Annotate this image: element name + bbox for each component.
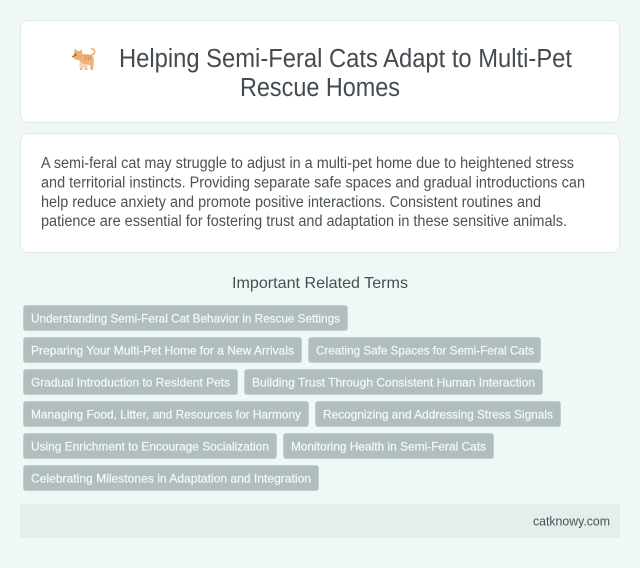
- chip: understanding behavior: Understanding Semi-Feral Cat Behavior in Rescue Settings: [31, 312, 340, 326]
- chip: celebrating milestones: [23, 465, 319, 491]
- summary text: patience are essential for fostering trust and adaptation in these sensitive animals.: [41, 213, 567, 230]
- title text: Helping Semi-Feral Cats Adapt to Multi-Pet: [119, 45, 572, 73]
- chip: monitoring health: [283, 433, 494, 459]
- footer source text: catknowy.com: [533, 514, 610, 528]
- icon: orange cat: [72, 48, 96, 70]
- chip: stress signals: Recognizing and Addressing Stress Signals: [323, 408, 553, 422]
- title text: [119, 45, 572, 102]
- chip: celebrating milestones: Celebrating Milestones in Adaptation and Integration: [31, 472, 311, 486]
- chip: managing resources: Managing Food, Litter, and Resources for Harmony: [31, 408, 301, 422]
- heading: important related terms: Important Related Terms: [232, 275, 408, 292]
- footer bar: [20, 504, 620, 538]
- chip: enrichment: [23, 433, 277, 459]
- summary text: [41, 155, 585, 230]
- chip: stress signals: [315, 401, 561, 427]
- chip: understanding behavior: [23, 305, 348, 331]
- chip: monitoring health: Monitoring Health in Semi-Feral Cats: [291, 440, 486, 454]
- panel: related term chips: [23, 305, 561, 491]
- chip: safe spaces: Creating Safe Spaces for Semi-Feral Cats: [316, 344, 534, 358]
- summary text: and territorial instincts. Providing separate safe spaces and gradual introductions can: [41, 174, 585, 192]
- chip: building trust: Building Trust Through Consistent Human Interaction: [252, 376, 535, 390]
- chip: preparing home: Preparing Your Multi-Pet Home for a New Arrivals: [31, 344, 294, 358]
- summary text: A semi-feral cat may struggle to adjust in a multi-pet home due to heightened stress: [41, 155, 574, 172]
- chip: safe spaces: [308, 337, 541, 363]
- chip: building trust: [244, 369, 543, 395]
- title text: Rescue Homes: [240, 74, 400, 102]
- chip: gradual introduction: Gradual Introduction to Resident Pets: [31, 376, 230, 390]
- chip: managing resources: [23, 401, 309, 427]
- panel: title card: [20, 20, 620, 123]
- panel: summary card: [20, 133, 620, 253]
- chip: enrichment: Using Enrichment to Encourage Socialization: [31, 440, 269, 454]
- summary text: help reduce anxiety and promote positive interactions. Consistent routines and: [41, 194, 541, 211]
- chip: preparing home: [23, 337, 302, 363]
- chip: gradual introduction: [23, 369, 238, 395]
